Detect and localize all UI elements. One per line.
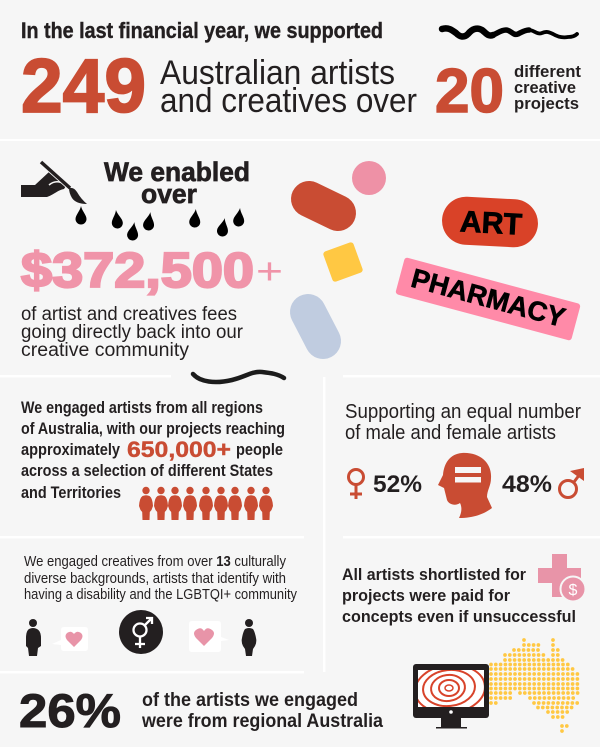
text: regional Australia (141, 690, 383, 732)
text: paid shortlisted artists (342, 565, 576, 626)
stat: fees amount: + (256, 251, 283, 292)
text: diverse backgrounds: We engaged creatives from over 13 culturally (24, 554, 287, 570)
stat: 52 percent: 52% (373, 471, 422, 498)
heading: we enabled over (104, 157, 250, 209)
text: fees description: of artist and creatives fees (21, 304, 237, 325)
text: regions reach (21, 399, 285, 502)
icon: pink cross with dollar (538, 554, 586, 602)
text: fees description (21, 304, 244, 361)
icon: computer monitor with artwork (413, 664, 489, 728)
text: diverse backgrounds (24, 554, 298, 603)
heading: equal gender: Supporting an equal number (345, 401, 581, 423)
icon: head with equals sign (438, 453, 492, 518)
stat: 249 artists: and creatives over (160, 82, 417, 120)
text: diverse backgrounds: having a disability and the LGBTQI+ community (24, 587, 298, 603)
heading: financial year intro: In the last financial year, we supported (21, 18, 383, 43)
text: fees description: going directly back into our (21, 322, 244, 343)
heading: we enabled over: We enabled (104, 157, 250, 187)
heading: equal gender: of male and female artists (345, 422, 556, 444)
icon: row of people (139, 487, 273, 520)
logo: pharmacy label: PHARMACY (408, 263, 568, 333)
stat: 20 projects (435, 57, 582, 126)
stat: 20 projects: creative (514, 79, 576, 97)
icon: hand holding paintbrush (21, 162, 87, 204)
text: regions reach: across a selection of different States (21, 462, 273, 480)
icon: male symbol (560, 468, 584, 498)
text: fees description: creative community (21, 340, 190, 361)
stat: 249 artists: 249 (21, 44, 146, 129)
stat: 20 projects: projects (514, 95, 579, 113)
decoration: brush stroke (193, 372, 284, 382)
stat: 249 artists: Australian artists (160, 54, 395, 92)
text: regions reach: 650,000+ (127, 437, 231, 462)
icon: paint drops (76, 206, 246, 241)
text: diverse backgrounds: diverse backgrounds, artists that identify with (24, 571, 286, 587)
text: paid shortlisted artists: projects were paid for (342, 586, 510, 605)
stat: 249 artists (21, 44, 417, 129)
text: paid shortlisted artists: concepts even if unsuccessful (342, 607, 576, 626)
text: regions reach: approximately (21, 441, 121, 459)
decoration: pills and shapes (308, 161, 386, 341)
icon: female symbol (348, 470, 364, 499)
text: regional Australia: of the artists we engaged (142, 690, 358, 711)
heading: equal gender (345, 401, 581, 444)
heading: we enabled over: over (141, 179, 197, 209)
icon: man with heart bubble (26, 619, 88, 656)
map: dotted Australia (491, 640, 578, 731)
stat: 20 projects: different (514, 63, 582, 81)
logo: art pill: ART (459, 205, 523, 242)
stat: 48 percent: 48% (502, 471, 552, 498)
stat: 20 projects: 20 (435, 57, 504, 126)
stat: 26 percent: 26% (19, 684, 121, 737)
text: regions reach: We engaged artists from all regions (21, 399, 263, 417)
icon: woman with heart bubble (189, 619, 256, 656)
icon: pink cross with dollar: $ (569, 582, 578, 599)
logo: art pill (441, 196, 539, 248)
text: paid shortlisted artists: All artists shortlisted for (342, 565, 526, 584)
text: regional Australia: were from regional Australia (141, 711, 383, 732)
icon: black squiggle (442, 28, 577, 37)
text: regions reach: people (236, 441, 283, 459)
text: regions reach: and Territories (21, 484, 121, 502)
stat: fees amount: $372,500 (21, 244, 254, 298)
text: regions reach: of Australia, with our projects reaching (21, 420, 285, 438)
icon: gender symbol in black circle (119, 610, 163, 654)
